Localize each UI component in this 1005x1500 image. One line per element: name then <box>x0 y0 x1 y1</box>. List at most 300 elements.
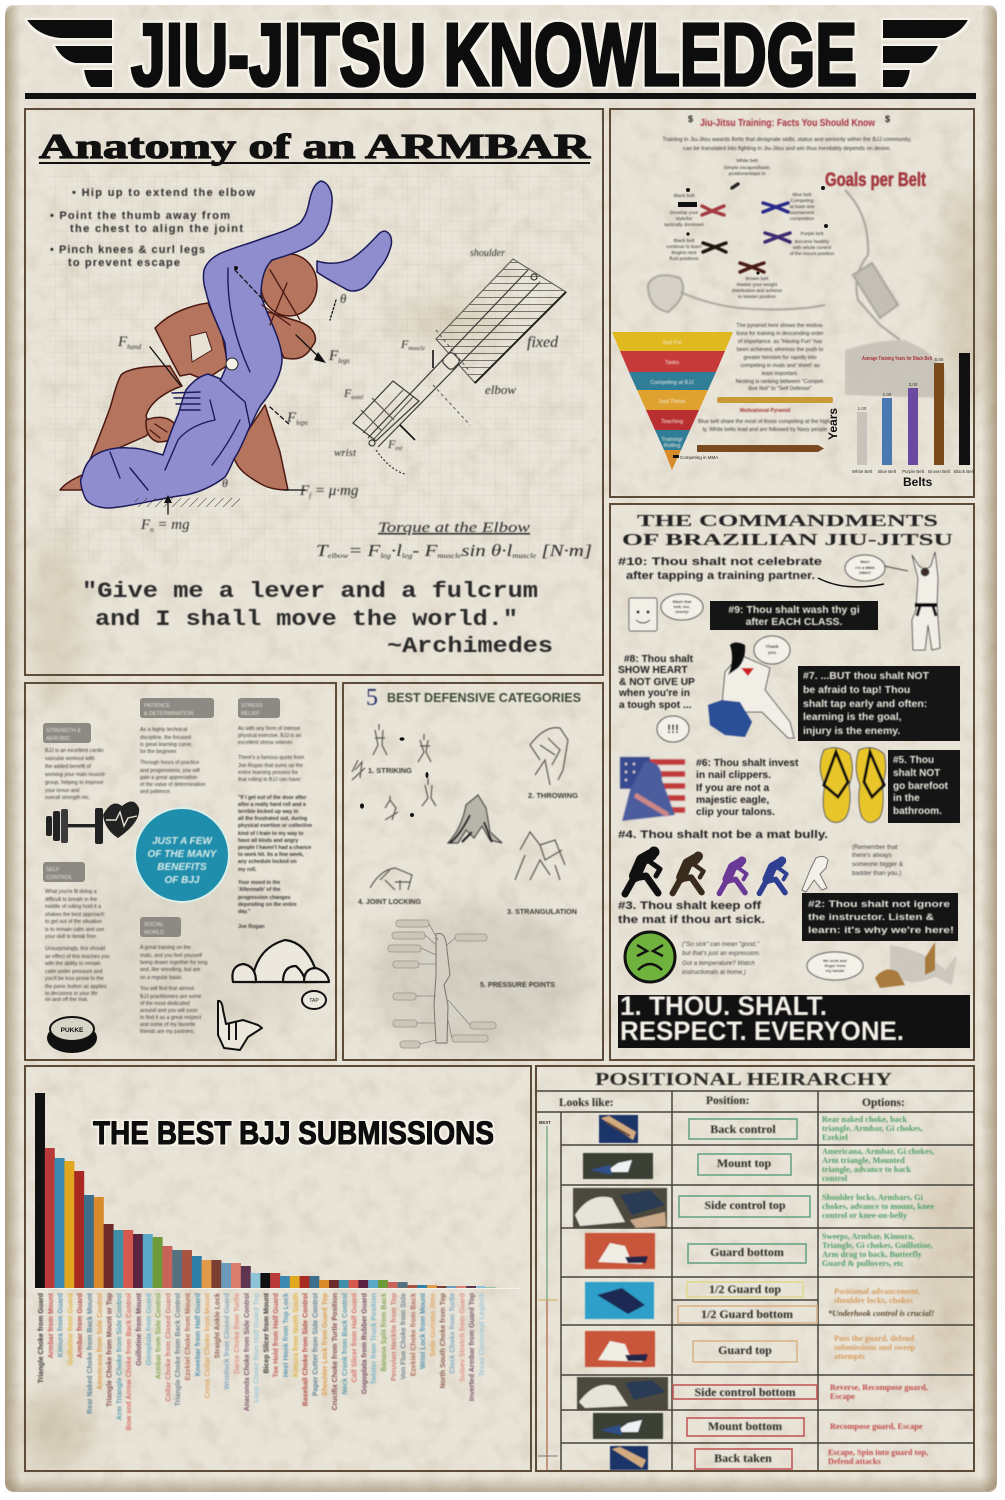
text: armbar tips: the chest to align the joint <box>70 223 243 235</box>
bar labels: Kneebar from Half Guard <box>195 1293 202 1376</box>
icons: belt silhouettes <box>625 849 828 894</box>
position labels: Back control <box>710 1122 776 1136</box>
title banner <box>25 5 976 104</box>
callout: commandment 7: #7. ...BUT thou shalt NOT <box>803 670 930 682</box>
text: column two: gain a great appreciation <box>140 775 197 781</box>
text: funnel notes: itive Not" to "Self Defense" <box>748 386 812 392</box>
bar labels: Armbar from Mount <box>48 1292 55 1358</box>
bar labels: Loop Choke from Half Guard Top <box>254 1293 260 1403</box>
heading: commandments <box>622 511 953 549</box>
text: funnel notes: been achieved, whereas the push to <box>737 347 823 353</box>
position labels <box>694 1122 796 1465</box>
text: column one <box>45 748 110 1003</box>
speech bubble: killa!!! <box>859 570 871 575</box>
text: column three: Joe Rogan <box>238 924 265 930</box>
bar labels: Calf Slicer from Half Guard <box>352 1293 358 1382</box>
heading: training facts: Jiu-Jitsu Training: Facts You Should Know <box>700 118 875 129</box>
grey labels: & DETERMINATION <box>144 711 193 717</box>
bar labels: Guillotine from Guard <box>68 1293 74 1365</box>
figure: pressure points body <box>388 920 496 1048</box>
labels: mechanics: F <box>388 437 395 451</box>
speech bubble <box>845 555 908 581</box>
icon: fighter on top: you <box>768 650 776 655</box>
bar labels: Triangle Choke from Back Control <box>175 1293 182 1406</box>
position labels: 1/2 Guard top <box>709 1282 781 1296</box>
text: column one: working your main muscle <box>45 772 105 778</box>
text: column three: my roll. <box>238 867 257 873</box>
bar: gold and brown belts <box>697 397 833 452</box>
text: column two: You will find that almost <box>140 986 195 992</box>
heading: training facts: $ <box>885 114 890 124</box>
labels: mechanics: ·l <box>391 541 402 560</box>
belt goals map: continue to learn <box>666 244 702 250</box>
options: red: Escape <box>830 1392 855 1401</box>
callout: commandment 5 <box>888 750 960 823</box>
chart: years per belt: 2.00 <box>883 392 892 397</box>
labels: mechanics: = mg <box>154 517 190 533</box>
bar labels: Omoplata from Guard <box>146 1293 153 1365</box>
chart: funnel: Just Thrive <box>659 399 685 405</box>
options: green: Rear naked choke, back <box>822 1115 908 1124</box>
icon: american flag fighter <box>620 757 685 821</box>
text: funnel notes: of importance. as "Having Fun" has <box>738 339 823 345</box>
bar labels: Bicep Slicer from Mount <box>264 1292 270 1374</box>
text: commandment 8: SHOW HEART <box>618 665 688 676</box>
text: commandment 3: the mat if thou art sick. <box>618 914 765 926</box>
chart: funnel: Training/ <box>661 437 683 443</box>
options: orange <box>828 1287 934 1361</box>
text: intro <box>662 137 912 152</box>
panel: anatomy of an armbar <box>39 127 592 659</box>
belt goals map: positions/stays in <box>729 171 766 177</box>
options: green: Sweeps, Armbar, Kimura, <box>822 1232 914 1241</box>
bar labels: Heel Hook from Top Lock <box>283 1293 290 1377</box>
text: funnel notes: greater heroism for rapidly into <box>743 355 817 361</box>
options: orange: *Underhook control is crucial! <box>828 1309 934 1318</box>
photo: guard bottom <box>585 1233 655 1269</box>
labels: mechanics: leg <box>402 552 413 560</box>
text: column three: As with any form of intense <box>238 726 300 732</box>
text: column three: 'Aftermath' of the <box>238 887 281 893</box>
icon: shaka hand <box>218 1001 262 1050</box>
bar labels: Crucifix Choke from Turtle Position <box>332 1293 339 1410</box>
quote: archimedes: "Give me a lever and a fulcrum <box>82 579 538 604</box>
callout: benefits circle: OF THE MANY <box>148 849 218 860</box>
chart: years per belt: 3.00 <box>909 382 918 387</box>
bar chart: submissions <box>35 1093 520 1289</box>
labels: mechanics: fixed <box>527 334 559 351</box>
chart: years per belt: Purple Belt <box>902 469 925 474</box>
belt goals map: to Master position <box>738 294 776 300</box>
grey labels: SOCIAL <box>144 922 164 928</box>
icon: rocks <box>232 940 329 982</box>
text: mat bully note: there's always <box>852 852 892 859</box>
labels: mechanics: F <box>300 483 309 499</box>
options: green: control or knee-on-belly <box>822 1211 908 1220</box>
chart: funnel: Just For <box>662 340 682 346</box>
icon: right wing <box>883 20 968 87</box>
belt goals map: tactically dominant <box>664 222 704 228</box>
labels: mechanics: leg <box>380 552 391 560</box>
text: column one: is to remain calm and use <box>45 927 104 933</box>
heading: positional hierarchy: POSITIONAL HEIRARCHY <box>595 1069 892 1089</box>
belt goals map: Develop your <box>670 210 699 216</box>
position labels: Side control top <box>704 1198 786 1212</box>
text: column one: an effect of this teaches you <box>45 954 110 960</box>
text: column one: the panic button as applies <box>45 984 107 990</box>
heading: defensive categories: BEST DEFENSIVE CATEGORIES <box>387 690 581 705</box>
labels: defensive categories <box>358 766 578 989</box>
text: column three: excellent stress reliever. <box>238 740 293 746</box>
labels: mechanics: elbow <box>328 552 349 560</box>
position boxes <box>673 1119 817 1469</box>
callout: commandment 5: in the <box>893 793 920 804</box>
heading: best bjj submissions: THE BEST BJJ SUBMISSIONS <box>93 1115 494 1151</box>
callout: commandment 7: shalt tap early and often: <box>803 698 927 710</box>
panel: training facts and goals per belt <box>612 114 975 489</box>
heading: goals per belt: Goals per Belt <box>825 170 927 191</box>
text: column one: your skill to break free. <box>45 934 97 940</box>
belt goals map: Blue belt <box>793 192 812 198</box>
chart: years per belt: 1.00 <box>858 406 867 411</box>
grey labels: AEROBIC <box>46 736 70 742</box>
options: green: triangle, Armbar, Gi chokes, <box>822 1124 923 1133</box>
text: column two: friends are my partners. <box>140 1029 195 1035</box>
belt goals map: Brown belt <box>746 276 769 282</box>
bar labels: Collar Choke from Closed Guard <box>166 1293 172 1402</box>
belt goals map: of the mount position <box>790 251 835 257</box>
photo: half guard <box>585 1282 654 1319</box>
text: column two: BJJ practitioners are some <box>140 994 202 1000</box>
labels: mechanics: = μ·mg <box>311 483 359 499</box>
text: column three: all the frustrated out, during <box>238 816 307 822</box>
bar labels: Kimura from North South <box>293 1293 300 1377</box>
text: commandment 6: clip your talons. <box>696 807 775 818</box>
position labels: Mount bottom <box>708 1419 782 1433</box>
labels: mechanics: T <box>316 541 325 560</box>
icon: monkey and fish: No sock and <box>823 958 847 963</box>
text: column one: you'll be less prone to the <box>45 976 104 982</box>
position labels: Guard top <box>718 1343 772 1357</box>
chart: funnel: Teaching <box>661 419 683 425</box>
text: column three <box>238 726 312 930</box>
labels: defensive categories: 4. JOINT LOCKING <box>358 897 421 906</box>
callout: commandment 2: the instructor. Listen & <box>808 912 934 923</box>
text: column one: on and off the mat. <box>45 997 88 1003</box>
text: commandment 3: #3. Thou shalt keep off <box>618 900 762 912</box>
labels: mechanics: F <box>344 386 351 400</box>
text: column three: physical exercise, BJJ is an <box>238 733 302 739</box>
photo: back taken <box>610 1446 648 1470</box>
text: column two: and some of my favorite <box>140 1022 195 1028</box>
figures: grappling sketches <box>352 724 568 890</box>
heading: defensive categories <box>366 685 581 711</box>
text: funnel notes: Blue belt share the most of those competing at the high- <box>698 419 832 425</box>
labels: mechanics: F <box>329 348 338 364</box>
text: column three: Joe Rogan that sums up the <box>238 763 303 769</box>
text: commandment 8: a tough spot ... <box>619 700 692 711</box>
icon: speech bubble tap <box>302 991 326 1009</box>
text: column one: group, helping to improve <box>45 780 104 786</box>
grey labels: CONTROL <box>46 875 72 881</box>
callout: benefits circle: OF BJJ <box>164 875 200 886</box>
options: red: Escape, Spin into guard top, <box>828 1448 928 1457</box>
text: intro: Training in Jiu-Jitsu awards Belts that designate skills, status and seniority within the BJJ community, <box>662 137 912 143</box>
speech bubble: I'm a MMA <box>855 565 875 570</box>
heading: commandments: THE COMMANDMENTS <box>637 511 938 530</box>
bar labels: Sode Guruma Jime <box>430 1293 437 1357</box>
speech bubble: Man! <box>860 559 870 564</box>
callout: benefits circle: BENEFITS <box>157 862 207 873</box>
text: sick note: instructionals at home.) <box>682 969 746 976</box>
text: column two: on a regular basis. <box>140 975 183 981</box>
text: mat bully note: (Remember that <box>852 844 898 851</box>
text: column one: difficult to breath in the <box>45 897 97 903</box>
labels: mechanics: legs <box>338 357 350 365</box>
labels: mechanics: F <box>141 517 150 533</box>
text: column one: Unsurprisingly, this should <box>45 946 105 952</box>
icon: flip flops <box>820 748 886 822</box>
bar labels: Darce Choke from Turtle <box>234 1293 241 1374</box>
text: commandment 6: in nail clippers. <box>696 770 771 781</box>
position labels: Guard bottom <box>710 1245 784 1259</box>
heading: defensive categories: 5 <box>366 685 378 711</box>
icon: fighter on top: !!! <box>667 722 679 736</box>
text: column three: kind of I train to my way to <box>238 831 303 837</box>
photo: mount top <box>583 1153 653 1179</box>
callout: commandment 7: learning is the goal, <box>803 711 902 723</box>
labels: defensive categories: 1. STRIKING <box>368 766 412 775</box>
text: column three: physical exertion or collective <box>238 823 312 829</box>
photo: guard top <box>585 1331 655 1367</box>
text: column three: day." <box>238 909 251 915</box>
text: commandment 8: & NOT GIVE UP <box>619 677 695 688</box>
text: column three: to work hit. Its a fine week, <box>238 852 304 858</box>
text: column two: of the most dedicated <box>140 1001 190 1007</box>
diagram: lever mechanics <box>353 259 566 474</box>
text: column two: Through hours of practice <box>140 760 199 766</box>
callout: commandment 1 <box>618 991 970 1048</box>
icon: detergent box: smelly! <box>675 609 689 614</box>
text: funnel notes: Motivational Pyramid <box>740 408 790 414</box>
text: column three: progression changes <box>238 895 291 901</box>
grey labels: SELF <box>46 867 60 873</box>
belt goals map: Black belt <box>674 238 695 244</box>
photo: side control bottom <box>577 1377 668 1410</box>
text: commandment 6: If you are not a <box>696 783 770 794</box>
labels: mechanics: elbow <box>485 382 516 397</box>
belt goals map: tournament <box>790 210 815 216</box>
bar labels: Wrist Lock from Mount <box>420 1292 427 1369</box>
text: sick note: but that's just an expression. <box>682 950 760 957</box>
chart: years per belt: White Belt <box>852 469 873 474</box>
belt goals map: distribution and achieve <box>732 288 783 294</box>
options: red <box>828 1383 928 1466</box>
bar labels: Inverted Armbar from Guard Top <box>469 1293 476 1401</box>
chart: years per belt: 5.00 <box>935 357 944 362</box>
bar labels: Ezekiel Choke from Back <box>410 1293 418 1376</box>
heading: training facts <box>688 114 890 129</box>
callout: benefits circle: JUST A FEW <box>152 836 213 847</box>
chart: funnel: Competing at BJJ <box>650 380 694 386</box>
text: intro: can be translated into fighting in Jiu-Jitsu and win thus inevitably depends on desire. <box>683 146 891 152</box>
bar labels: Clock Choke from Turtle <box>450 1293 456 1374</box>
position labels: Mount top <box>717 1156 771 1170</box>
chart: years per belt: Black Belt <box>954 469 975 474</box>
text: armbar tips: to prevent escape <box>68 257 180 269</box>
photo: back control <box>599 1115 638 1143</box>
bar labels: Ezekiel Choke from Mount <box>185 1292 192 1381</box>
bar labels: Banana Split from Back <box>381 1293 388 1372</box>
bar labels: Neck Crank from Back Control <box>342 1293 349 1395</box>
icon: fighter on top: Thank <box>765 644 779 649</box>
bar labels: Paper Cutter from Side Control <box>312 1293 320 1396</box>
text: commandment 10: #10: Thou shalt not celebrate <box>618 556 822 568</box>
options: red: Recompose guard, Escape <box>830 1422 923 1431</box>
labels: mechanics: hand <box>127 343 142 351</box>
bar labels: Peruvian Necktie from Top <box>391 1293 398 1381</box>
labels: defensive categories: 2. THROWING <box>528 791 578 800</box>
options: green: control <box>822 1174 848 1183</box>
labels: mechanics: wrist <box>334 447 357 459</box>
text: funnel notes: least important. <box>762 371 798 377</box>
belt goals map: Purple belt <box>801 231 824 237</box>
text: column one: to decisions in your life <box>45 991 98 997</box>
chart: funnel <box>612 332 733 470</box>
text: commandment 8 <box>618 654 695 711</box>
options: orange: attempts <box>834 1352 866 1361</box>
brown legs and arm <box>60 254 317 490</box>
bar labels <box>38 1292 486 1430</box>
callout: commandment 2 <box>802 893 958 941</box>
bar labels: Kimura from Guard <box>58 1293 64 1357</box>
panel: commandments <box>618 511 970 1048</box>
heading: armbar: Anatomy of an ARMBAR <box>39 127 591 166</box>
bar labels: North South Choke from Top <box>440 1293 447 1389</box>
text: column three: Your mood in the <box>238 880 280 886</box>
bar labels: Shoulder Lock from Guard Top <box>322 1293 329 1396</box>
blue figure <box>81 181 392 508</box>
table grid <box>537 1091 974 1470</box>
chart: years per belt: Blue Belt <box>878 469 897 474</box>
text: mat bully note <box>852 844 904 877</box>
grey labels: STRESS <box>241 703 263 709</box>
text: column one: with the ability to remain <box>45 961 101 967</box>
text: column one: shakes the best approach <box>45 912 105 918</box>
text: commandment 6: #6: Thou shalt invest <box>696 758 799 769</box>
labels: mechanics: hips <box>296 419 308 427</box>
belt goals map: Begins next <box>671 250 697 256</box>
text: column two: discipline, the focused <box>140 735 191 741</box>
text: commandment 3 <box>618 900 765 926</box>
belt goals map: White belt <box>736 158 758 164</box>
table headers: Options: <box>862 1097 905 1109</box>
text: commandment 10: after tapping a training partner. <box>626 570 815 582</box>
callout: commandment 7 <box>798 666 960 741</box>
text: armbar tips <box>50 187 255 269</box>
background sketch <box>648 190 945 398</box>
icon: mat puck: PUKKE <box>61 1027 84 1034</box>
text: commandment 8: #8: Thou shalt <box>624 654 694 665</box>
icon: detergent box: belt, too, <box>674 604 690 609</box>
text: column two: being drawn together for long <box>140 960 208 966</box>
text: armbar tips: • Hip up to extend the elbow <box>72 187 255 199</box>
options: orange: submissions and sweep <box>834 1343 916 1352</box>
labels: mechanics: muscle <box>437 552 461 560</box>
belt goals map: with whole control <box>793 245 831 251</box>
callout: commandment 2: learn: it's why we're here! <box>808 925 954 936</box>
bar labels: Wristlock from Closed Guard <box>224 1293 231 1390</box>
icon: dumbbell and heart <box>46 801 139 844</box>
belt goals map <box>664 158 835 300</box>
text: column three: depending on the entire <box>238 902 297 908</box>
text: sick note: ("So sick" can mean "good," <box>682 941 760 948</box>
paper gap between arm and thigh <box>190 332 212 362</box>
icon: mat puck <box>47 1017 97 1053</box>
text: column two: and, like wrestling, but are <box>140 967 200 973</box>
bar labels: Triangle Choke from Guard <box>38 1293 45 1383</box>
text: column two: A great training on the <box>140 945 191 951</box>
options: green: Triangle, Gi chokes, Guillotine, <box>822 1241 932 1250</box>
options: green: Shoulder locks, Armbars, Gi <box>822 1193 924 1202</box>
labels: mechanics: [N·m] <box>536 541 592 560</box>
quote: archimedes: ~Archimedes <box>387 634 553 659</box>
labels: mechanics: muscle <box>408 346 425 352</box>
labels: mechanics: F <box>401 337 408 351</box>
text: commandment 6 <box>696 758 799 818</box>
icon: detergent box: Wash that <box>673 599 692 604</box>
text: column two: is great learning curve, <box>140 742 192 748</box>
options: green: triangle, advance to back <box>822 1165 911 1174</box>
blue belt silhouette <box>759 858 787 893</box>
grey labels: RELIEF <box>241 711 261 717</box>
icon: speech bubble tap: TAP <box>309 998 319 1004</box>
text: column one: BJJ is an excellent cardio <box>45 748 104 754</box>
callout: commandment 2: #2: Thou shalt not ignore <box>808 899 950 910</box>
callout: commandment 1: 1. THOU. SHALT. <box>620 991 827 1021</box>
figure: armbar bodies <box>60 181 392 514</box>
text: column two: As a highly technical <box>140 727 187 733</box>
text: commandment 10 <box>618 556 822 582</box>
bar labels: Armbar from Guard <box>77 1293 84 1358</box>
text: column three: any schedule locked on <box>238 859 297 865</box>
hierarchy scale: BEST <box>539 1120 551 1125</box>
bar labels: Triangle Choke from Mount or Top <box>106 1293 114 1407</box>
labels: mechanics: θ <box>340 291 347 306</box>
bar labels: Gogoplata from Rubber Guard <box>362 1293 368 1394</box>
bar labels: Straight Ankle Lock <box>214 1293 222 1358</box>
bar labels: Twister from Truck Position <box>371 1293 378 1385</box>
bar labels: Toe Hold from Half Guard <box>273 1293 280 1378</box>
chart: years per belt: Years <box>826 408 840 440</box>
icon: sick face <box>625 932 675 982</box>
labels: mechanics: muscle <box>512 552 536 560</box>
chart: years per belt <box>826 353 975 489</box>
photo: side control top <box>573 1188 667 1228</box>
text: column two <box>140 727 208 1035</box>
panel: best bjj submissions <box>35 1093 520 1430</box>
grey labels: PATIENCE <box>144 703 171 709</box>
text: column three: There's a famous quote from <box>238 755 304 761</box>
text: column two: for the beginner. <box>140 749 178 755</box>
chart: years per belt: Brown Belt <box>928 469 951 474</box>
options: orange: shoulder locks, chokes <box>834 1296 914 1305</box>
options: green: Guard & pullovers, etc <box>822 1259 904 1268</box>
callout: commandment 9: #9: Thou shalt wash thy gi <box>728 604 860 616</box>
text: column three: have all kinds and angry <box>238 838 298 844</box>
labels: mechanics <box>117 248 592 560</box>
icon: fighter on top <box>657 636 794 742</box>
